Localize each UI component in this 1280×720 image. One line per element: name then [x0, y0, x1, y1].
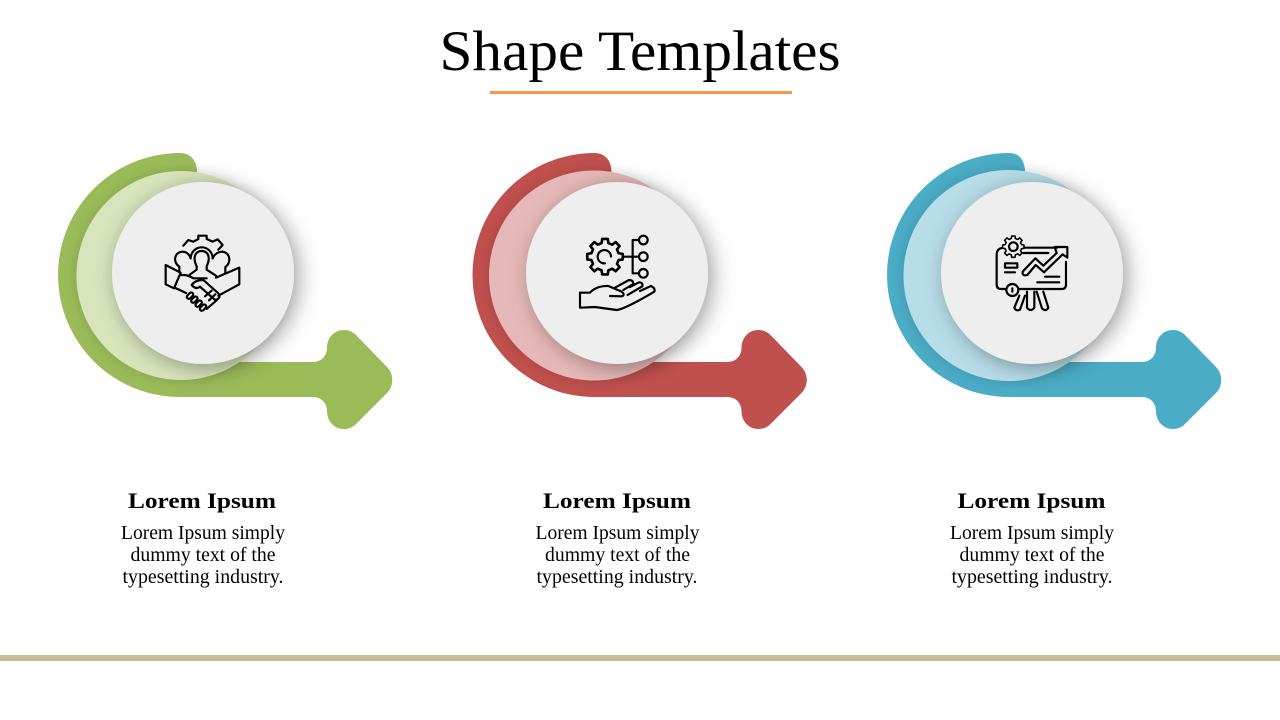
icon: handshake with team and gear: [166, 236, 239, 312]
grey circle: [526, 182, 708, 364]
panel: blue arrow step: [887, 153, 1221, 429]
body: typesetting industry.: [536, 567, 698, 588]
panel: red arrow step: [473, 153, 807, 429]
text block: blue step: [950, 488, 1114, 588]
blue light circle: [904, 170, 1114, 381]
grey circle: [941, 182, 1123, 364]
red curved arrow: [473, 153, 807, 429]
icon: presentation board with growth chart: [997, 236, 1067, 310]
body: Lorem Ipsum simply: [121, 523, 285, 544]
grey circle: [112, 182, 294, 364]
title underline: [490, 91, 792, 94]
body: typesetting industry.: [122, 567, 284, 588]
body: [950, 523, 1114, 588]
panel: green arrow step: [58, 153, 392, 429]
heading: Lorem Ipsum: [543, 488, 691, 513]
title: Shape Templates: [440, 20, 840, 83]
body: [121, 523, 285, 588]
body: [536, 523, 700, 588]
heading: Lorem Ipsum: [958, 488, 1106, 513]
blue curved arrow: [887, 153, 1221, 429]
body: dummy text of the: [960, 545, 1104, 566]
body: Lorem Ipsum simply: [950, 523, 1114, 544]
green light circle: [76, 171, 286, 380]
footer bar: [0, 655, 1280, 661]
icon: gear network over open hand: [580, 236, 655, 310]
body: typesetting industry.: [952, 567, 1112, 588]
text block: red step: [536, 488, 700, 588]
green curved arrow: [58, 153, 392, 429]
body: dummy text of the: [545, 545, 690, 566]
body: Lorem Ipsum simply: [536, 523, 700, 544]
heading: Lorem Ipsum: [128, 488, 276, 513]
text block: green step: [121, 488, 285, 588]
red light circle: [489, 170, 699, 380]
body: dummy text of the: [130, 545, 276, 566]
